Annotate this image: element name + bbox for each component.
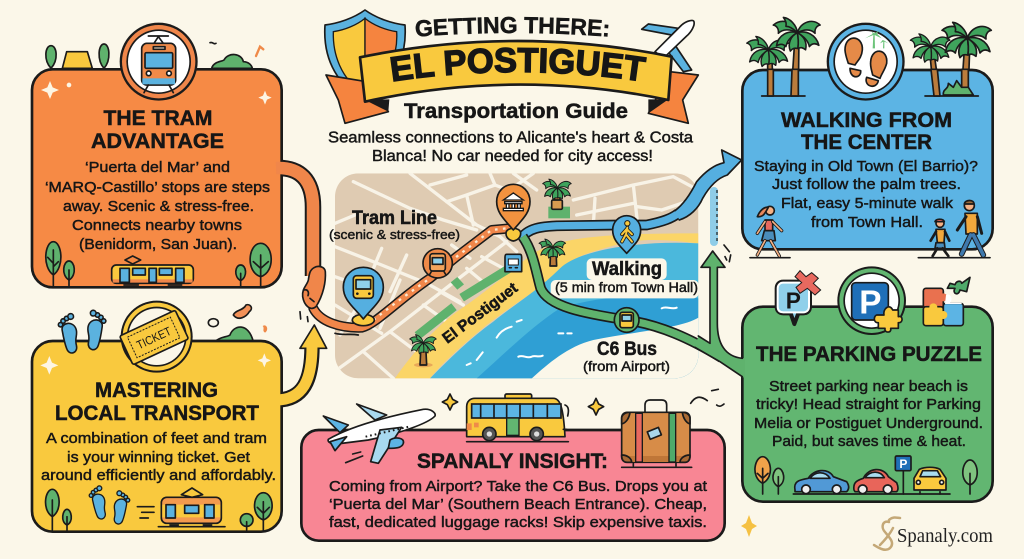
panel heading: WALKING FROM <box>781 109 952 132</box>
icon: parking badge: P <box>859 284 881 321</box>
panel heading: SPANALY INSIGHT: <box>417 450 608 473</box>
arrow: yellow fill <box>276 346 312 400</box>
panel text: fast, dedicated luggage racks! Skip expensive taxis. <box>329 514 707 531</box>
trees <box>755 457 977 494</box>
panel body <box>742 70 993 249</box>
ribbon fold right <box>648 99 668 113</box>
icon: tram <box>158 488 225 527</box>
palm tree beach <box>539 239 566 266</box>
panel text: Melia or Postiguet Underground. <box>754 415 983 432</box>
panel: mastering local transport <box>32 301 282 532</box>
palms left <box>747 17 820 96</box>
parking row <box>793 456 950 494</box>
panel text: around efficiently and affordably. <box>41 467 276 484</box>
panel text: away. Scenic & stress-free. <box>63 198 254 215</box>
palm bases <box>762 69 978 96</box>
logo: Spanaly.com: Spanaly.com <box>897 525 993 547</box>
ribbon tail left <box>326 75 388 123</box>
banner <box>360 41 672 102</box>
panel text: (Benidorm, San Juan). <box>79 236 237 253</box>
icon: ticket badge: TICKET <box>134 324 174 352</box>
map label: walking time: (5 min from Town Hall) <box>555 280 698 295</box>
map deep water <box>477 295 698 378</box>
skyline decoration <box>46 42 263 68</box>
icon: footprints badge <box>827 23 905 101</box>
palm tree south <box>410 335 436 367</box>
bottom trees <box>46 489 272 530</box>
map sea <box>430 243 698 378</box>
panel heading <box>55 379 259 425</box>
arrow: yellow to map <box>277 325 327 400</box>
icon: tram badge <box>120 23 198 101</box>
logo: Spanaly.com <box>874 518 993 550</box>
panel: the tram advantage <box>32 23 282 287</box>
icon: no street parking: P <box>786 287 801 313</box>
map label: scenic: (scenic & stress-free) <box>329 227 460 242</box>
ribbon tail right <box>648 72 698 123</box>
map streets <box>335 173 697 378</box>
icon: suitcase <box>622 400 692 467</box>
birds <box>691 389 724 406</box>
map park block <box>451 277 464 290</box>
sparkle right <box>588 398 604 415</box>
map park strip <box>417 269 508 336</box>
map label: C6 bus: C6 Bus <box>597 339 657 360</box>
panel text <box>754 378 983 450</box>
panel body <box>32 69 282 287</box>
panel text: ‘Puerta del Mar’ and <box>85 159 230 176</box>
beach label backing: walking note <box>551 280 699 298</box>
panel heading: THE TRAM <box>104 107 212 130</box>
sparkle left <box>442 394 458 410</box>
subtitle: transportation guide: Transportation Guide <box>404 100 628 123</box>
panel body <box>32 341 282 532</box>
bush decoration <box>208 305 267 342</box>
panel heading: THE CENTER <box>801 131 932 154</box>
pin: walking <box>613 216 641 253</box>
panel heading: LOCAL TRANSPORT <box>55 402 259 425</box>
arrow head <box>300 325 327 348</box>
ribbon fold left <box>365 99 389 112</box>
map land <box>335 173 698 378</box>
arrow: tram panel to map <box>276 168 313 276</box>
panel text: Street parking near beach is <box>769 378 968 395</box>
palms right <box>910 22 991 96</box>
panel body <box>742 307 993 502</box>
beach label backing: walking <box>587 258 667 280</box>
panel text <box>45 159 270 253</box>
map outside area <box>530 317 700 380</box>
icon: ticket badge <box>120 301 193 373</box>
palm tree top <box>543 179 571 218</box>
sparkles <box>41 81 272 105</box>
pin: bus stop <box>343 267 383 326</box>
title block <box>324 9 700 165</box>
pin: town hall <box>497 184 530 241</box>
map beach <box>395 233 698 378</box>
panel text: Connects nearby towns <box>72 217 242 234</box>
panel text <box>754 158 978 231</box>
blue walking route <box>520 213 678 240</box>
icon: top footprints <box>57 310 107 355</box>
title line: getting there: GETTING THERE: <box>416 16 608 37</box>
panel heading: MASTERING <box>95 379 218 402</box>
dashed path strip <box>710 187 718 246</box>
panel text: ‘Puerta del Mar’ (Southern Beach Entrance). Cheap, <box>329 496 707 513</box>
sparkle <box>741 515 757 537</box>
panel: spanaly insight <box>301 389 725 541</box>
arrow end: tram blob <box>300 266 358 335</box>
intro line 1: Seamless connections to Alicante's heart & Costa <box>328 130 693 146</box>
pin: tram stop <box>423 249 452 278</box>
logo mark <box>874 518 900 550</box>
icon: parking badge <box>837 266 906 335</box>
central map <box>313 173 722 380</box>
panel heading <box>781 109 952 154</box>
icon: bottom footprints <box>88 485 131 525</box>
panel body <box>301 430 725 541</box>
icon: airplane <box>323 404 435 463</box>
panel heading <box>91 107 224 153</box>
icon: airplane <box>642 21 694 72</box>
panel: walking from the center <box>742 17 993 258</box>
panel text: is your winning ticket. Get <box>67 449 251 466</box>
icon: small tram <box>112 256 193 285</box>
person: man <box>957 200 983 255</box>
panel heading: THE PARKING PUZZLE <box>756 343 982 366</box>
pin: C6 bus stop <box>614 308 639 332</box>
icon: beach bus stop sign <box>505 254 522 272</box>
panel text: tricky! Head straight for Parking <box>756 396 981 413</box>
parking row: P <box>899 457 907 471</box>
person: woman <box>750 206 790 258</box>
panel: the parking puzzle <box>742 266 993 502</box>
panel text: from Town Hall. <box>811 214 923 231</box>
map label: from airport: (from Airport) <box>583 359 670 374</box>
arrow: tram connector fill <box>276 168 313 276</box>
panel text: Just follow the palm trees. <box>772 176 961 193</box>
map label: walking: Walking <box>592 259 662 280</box>
person: child <box>918 219 990 258</box>
icon: no street parking <box>777 271 821 324</box>
map water ripples <box>467 307 677 365</box>
map label: tram line: Tram Line <box>352 208 437 229</box>
panel text: Paid, but saves time & heat. <box>772 433 966 450</box>
sparkles <box>40 353 271 375</box>
arrow: blue to walking panel <box>675 150 742 262</box>
intro line 2: Blanca! No car needed for city access! <box>372 148 653 165</box>
map label: El Postiguet: El Postiguet <box>439 280 521 347</box>
motion lines <box>137 507 154 518</box>
panel text: A combination of feet and tram <box>46 430 267 447</box>
panel text <box>41 430 276 484</box>
arrow: green to map <box>695 251 745 377</box>
icon: shield <box>325 10 405 102</box>
orange tram route <box>313 228 510 328</box>
green bus route <box>523 237 722 358</box>
panel text: Staying in Old Town (El Barrio)? <box>754 158 978 175</box>
panel text: Flat, easy 5-minute walk <box>781 195 954 212</box>
bottom trees <box>46 242 271 286</box>
panel text: Coming from Airport? Take the C6 Bus. Drops you at <box>329 478 708 495</box>
title line: El Postiguet: EL POSTIGUET <box>390 47 647 82</box>
panel heading: ADVANTAGE <box>91 130 224 153</box>
panel text <box>329 478 708 531</box>
icon: puzzle pieces <box>923 277 970 326</box>
panel text: ‘MARQ-Castillo’ stops are steps <box>45 179 270 196</box>
icon: bus <box>467 394 568 442</box>
